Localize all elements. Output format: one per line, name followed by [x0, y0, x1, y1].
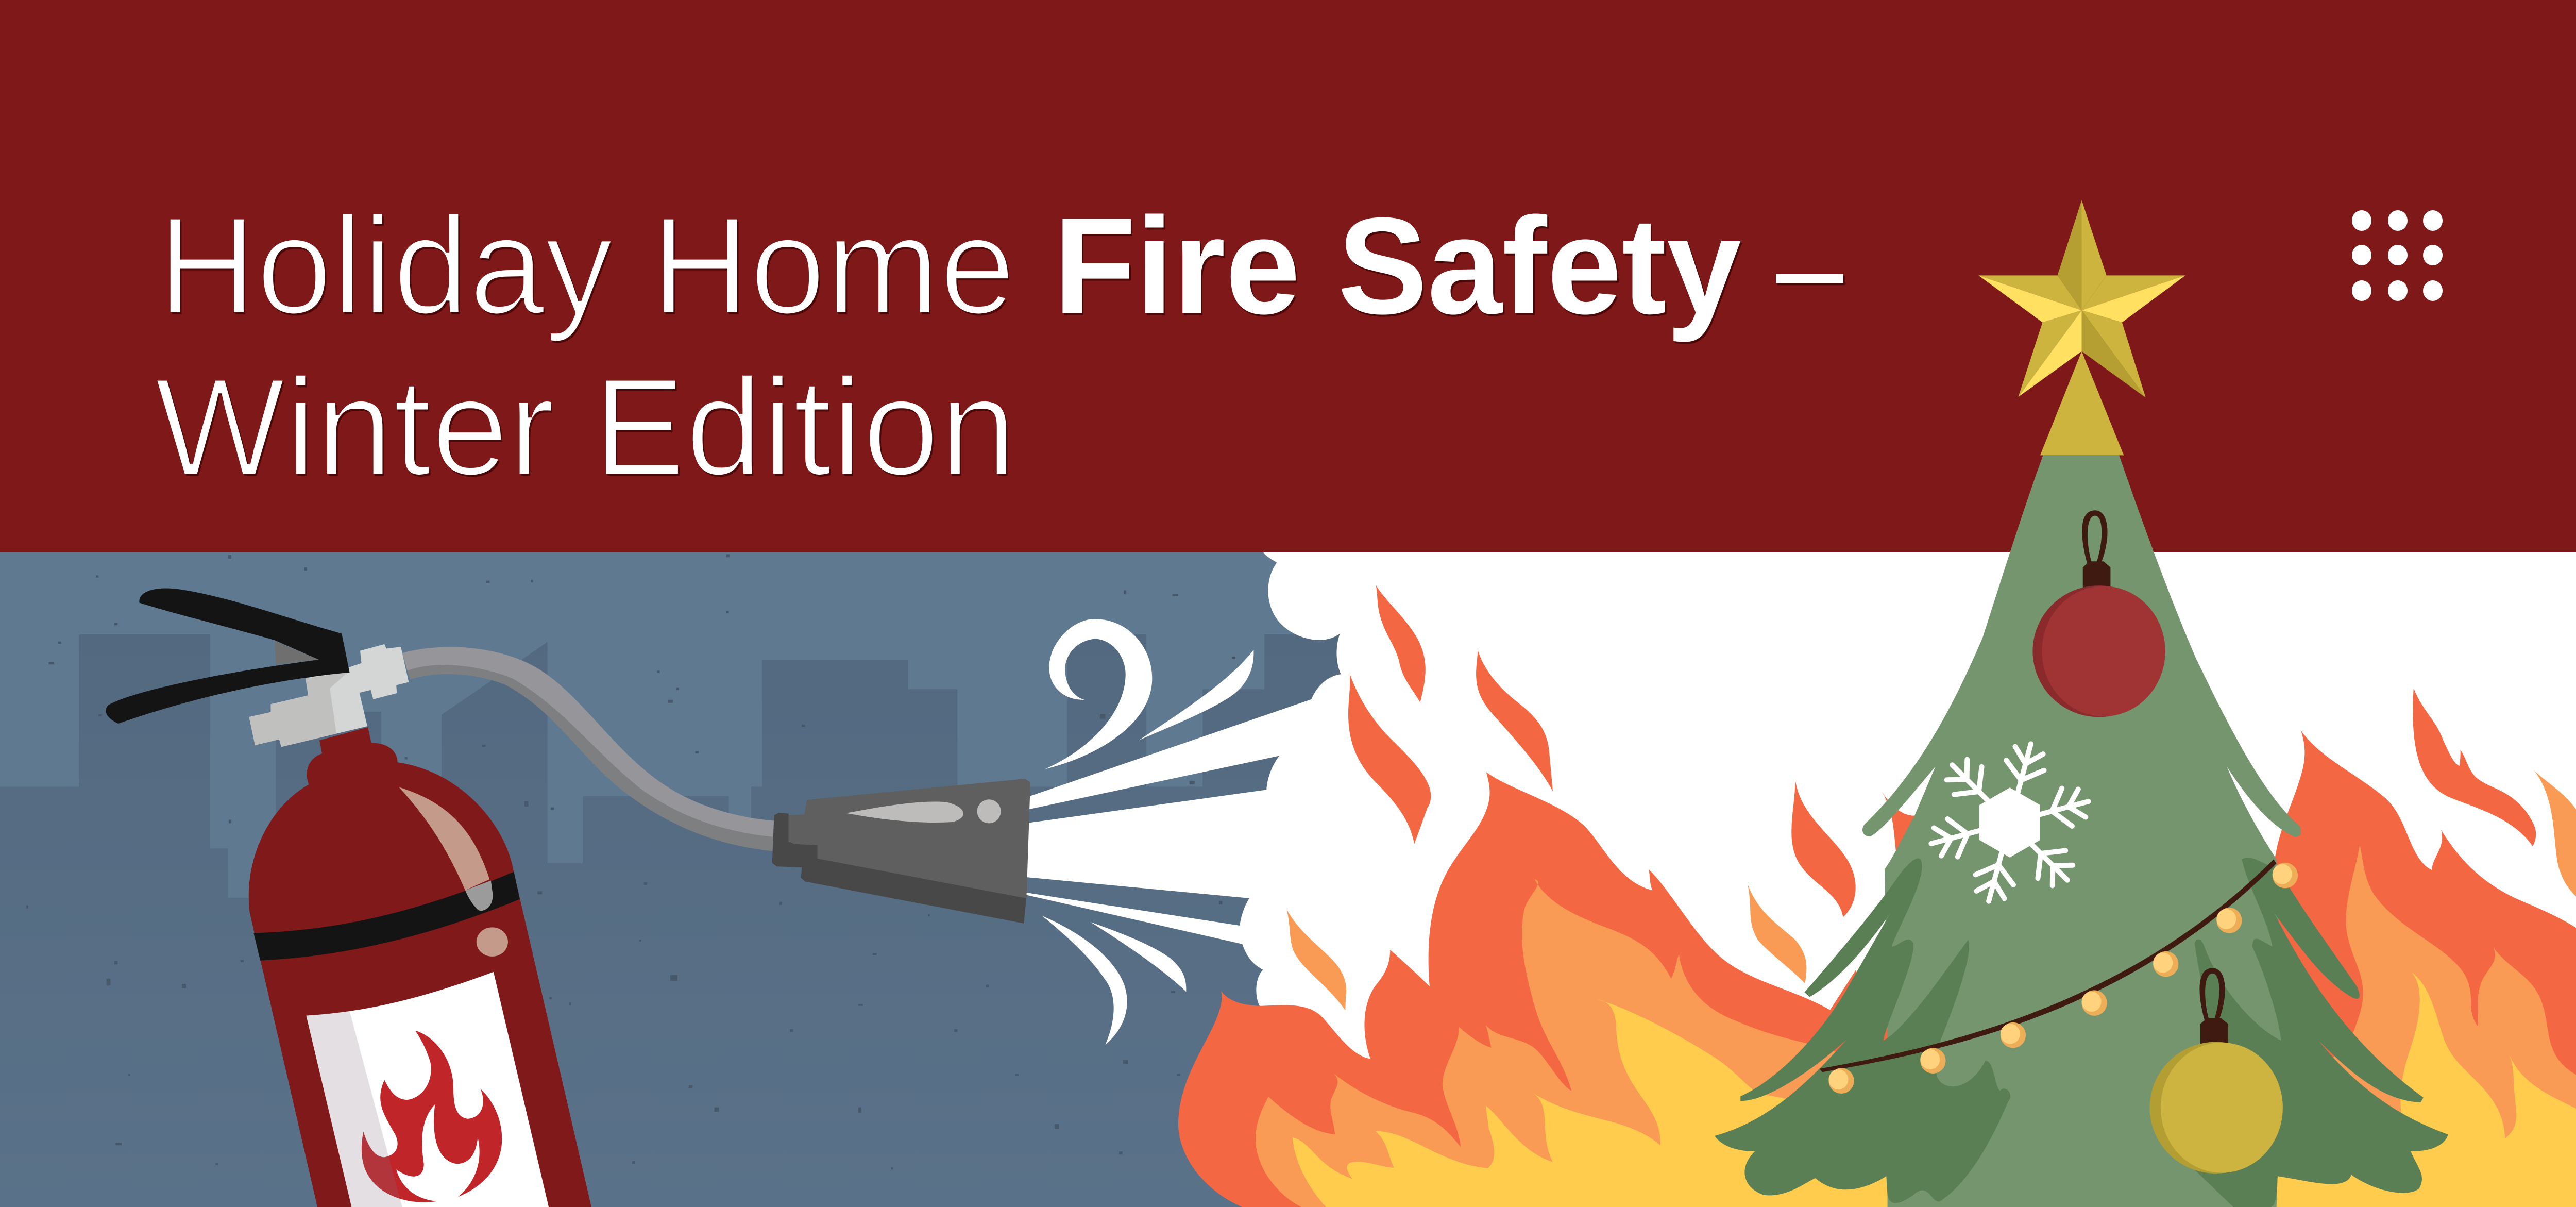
- tree lower right branches: [2193, 858, 2448, 1207]
- middle flame: [1256, 879, 1967, 1207]
- middle flame right: [2290, 845, 2576, 1207]
- star topper base: [2040, 351, 2124, 455]
- cylinder body: [249, 727, 591, 1207]
- spray streak upper: [1139, 650, 1253, 741]
- icon: snowflake: [1926, 739, 2093, 906]
- flames left of the tree: [1178, 585, 1967, 1207]
- floating flame 2: [1476, 650, 1553, 792]
- belt: [253, 872, 520, 961]
- highlight over belt: [465, 881, 493, 911]
- title: Holiday Home: [158, 188, 1015, 344]
- inner flame right: [2265, 973, 2576, 1207]
- label shade: [306, 1011, 402, 1207]
- star: [1978, 200, 2185, 397]
- light string: [1820, 859, 2277, 1072]
- flames right of the tree: [2215, 689, 2576, 1207]
- floating flame 1: [1376, 585, 1426, 702]
- red ornament: [2032, 510, 2165, 717]
- inner flame: [1293, 999, 1967, 1207]
- tree body: [1862, 455, 2301, 1207]
- nozzle: [772, 779, 1030, 924]
- small flames beside the tree: [1748, 780, 1914, 1027]
- label panel: [306, 972, 549, 1207]
- icon: flame on label: [362, 1031, 502, 1202]
- rivet: [477, 927, 508, 957]
- outer flame right: [2215, 730, 2576, 1207]
- floating flame 3: [1348, 674, 1431, 844]
- floating flame right: [2413, 689, 2536, 846]
- hose: [402, 647, 777, 851]
- night sky panel with city skyline: [0, 552, 1380, 1207]
- spray swirl upper left: [1045, 619, 1152, 769]
- header band: [0, 0, 2576, 552]
- icon: nine-dot menu grid: [2352, 210, 2443, 301]
- spray streak lower left: [1042, 916, 1127, 1045]
- christmas tree: [1715, 200, 2448, 1207]
- water spray and smoke cloud: [1025, 552, 2576, 1207]
- outer flame: [1178, 772, 1967, 1207]
- title: –: [1776, 189, 1844, 343]
- title: Winter Edition: [155, 349, 1016, 504]
- tree lower left branches: [1715, 858, 2010, 1203]
- highlight: [399, 787, 489, 891]
- fire extinguisher: [106, 589, 1030, 1207]
- gold ornament: [2150, 968, 2283, 1174]
- valve: [249, 644, 409, 747]
- string lights: [1828, 863, 2298, 1094]
- floating flame 4: [1286, 909, 1346, 1010]
- title: [155, 188, 1844, 504]
- title: Fire Safety: [1054, 189, 1742, 343]
- floating ember right: [2534, 770, 2576, 920]
- handle: [106, 589, 350, 724]
- spray streak lower right: [1091, 922, 1186, 992]
